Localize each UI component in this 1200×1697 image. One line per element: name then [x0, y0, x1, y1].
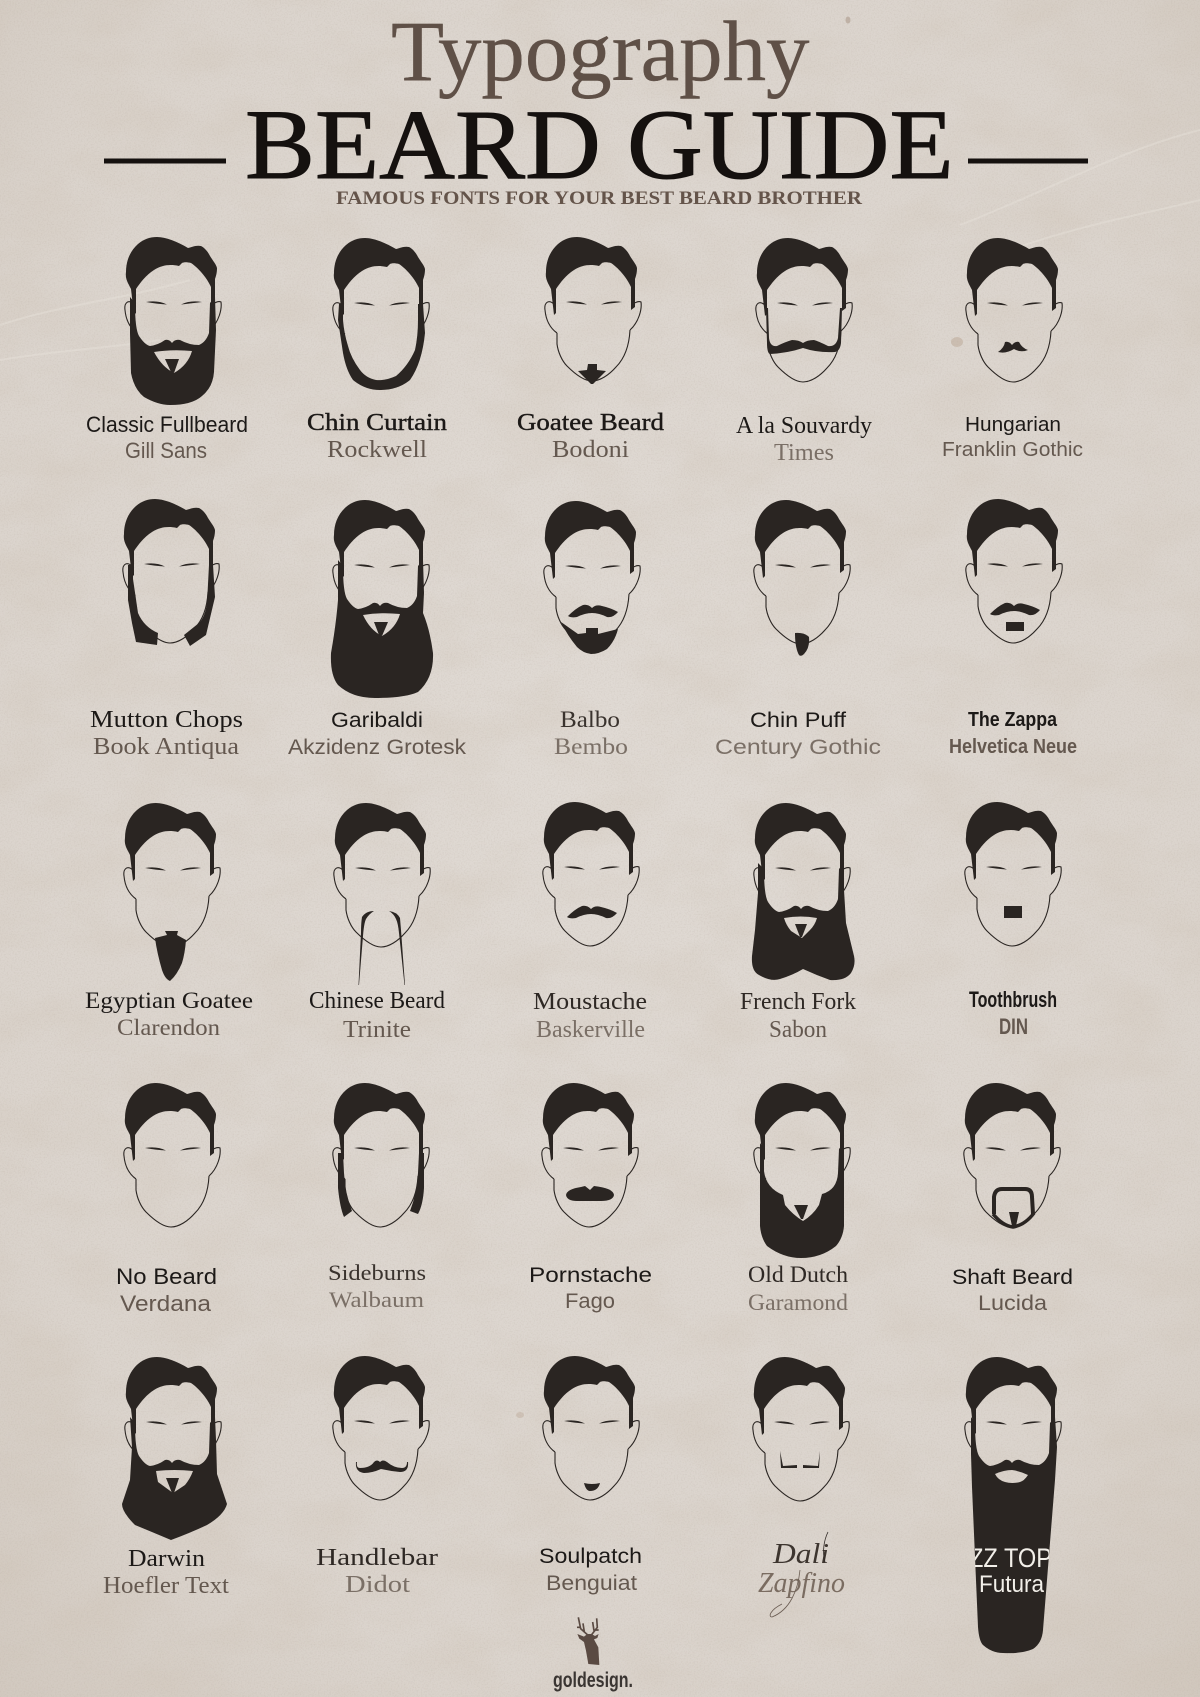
logo: deer head [577, 1617, 599, 1665]
face: French Fork [752, 803, 855, 980]
subtitle: FAMOUS FONTS FOR YOUR BEST BEARD BROTHER [336, 188, 862, 209]
label: Soulpatch / Benguiat: Benguiat [546, 1572, 637, 1595]
label: Toothbrush / DIN: DIN [999, 1014, 1028, 1039]
face: Old Dutch [754, 1083, 850, 1258]
label: Hungarian / Franklin Gothic [942, 414, 1083, 461]
label: Sideburns / Walbaum: Walbaum [329, 1287, 424, 1312]
label: Pornstache / Fago [529, 1264, 652, 1313]
label: Dali / Zapfino: Dali [772, 1539, 829, 1570]
label: French Fork / Sabon: French Fork [740, 989, 856, 1015]
face: The Zappa [966, 499, 1062, 643]
label: Egyptian Goatee / Clarendon: Egyptian Goatee [85, 988, 253, 1013]
label: Soulpatch / Benguiat [539, 1545, 642, 1595]
label: Mutton Chops / Book Antiqua: Mutton Chops [90, 707, 243, 733]
label: Mutton Chops / Book Antiqua: Book Antiqua [93, 734, 239, 760]
label: Garibaldi / Akzidenz Grotesk [288, 709, 467, 759]
face: A la Souvardy [756, 238, 852, 382]
face: Chin Puff [754, 500, 850, 656]
label: Balbo / Bembo: Bembo [554, 734, 628, 759]
label: Old Dutch / Garamond: Old Dutch [748, 1262, 849, 1287]
label: Balbo / Bembo: Balbo [560, 707, 620, 732]
label: Mutton Chops / Book Antiqua [90, 707, 243, 760]
face: Hungarian [966, 238, 1062, 382]
label: Chin Puff / Century Gothic: Century Gothic [715, 736, 881, 759]
face: Sideburns [333, 1083, 429, 1227]
label: Goatee Beard / Bodoni: Bodoni [552, 437, 629, 463]
label: Chin Puff / Century Gothic: Chin Puff [750, 709, 846, 732]
label: Classic Fullbeard / Gill Sans: Gill Sans [125, 438, 207, 463]
label: Hungarian / Franklin Gothic: Franklin Gothic [942, 439, 1083, 461]
label: Goatee Beard / Bodoni [517, 410, 664, 463]
label: Dali / Zapfino: Zapfino [758, 1568, 845, 1599]
label: Hungarian / Franklin Gothic: Hungarian [965, 414, 1061, 436]
label: Shaft Beard / Lucida: Shaft Beard [952, 1266, 1073, 1289]
label: Garibaldi / Akzidenz Grotesk: Garibaldi [331, 709, 423, 732]
logo: goldesign wordmark: goldesign. [553, 1669, 633, 1692]
label: ZZ Top / Futura [975, 1548, 1049, 1592]
label: Goatee Beard / Bodoni: Goatee Beard [517, 410, 664, 436]
face: Classic Fullbeard [125, 237, 221, 405]
face: Moustache [543, 802, 639, 946]
label: No Beard / Verdana [116, 1264, 217, 1316]
label: Handlebar / Didot [316, 1545, 438, 1598]
face: Balbo [544, 501, 640, 654]
label: Sideburns / Walbaum: Sideburns [328, 1260, 426, 1285]
label: Classic Fullbeard / Gill Sans [86, 412, 248, 463]
label: No Beard / Verdana: Verdana [120, 1291, 212, 1316]
face: Egyptian Goatee [124, 803, 220, 981]
label: Handlebar / Didot: Didot [345, 1572, 410, 1598]
label: Chinese Beard / Trinite: Chinese Beard [309, 988, 445, 1014]
label: Pornstache / Fago: Pornstache [529, 1264, 652, 1287]
label: ZZ Top / Futura: ZZ TOP [969, 1543, 1052, 1573]
label: Chinese Beard / Trinite [309, 988, 445, 1043]
label: Shaft Beard / Lucida [952, 1266, 1073, 1315]
face: Pornstache [542, 1083, 638, 1227]
label: French Fork / Sabon [740, 989, 856, 1043]
label: Moustache / Baskerville [533, 989, 647, 1043]
face: Chin Curtain [333, 238, 429, 390]
label: Darwin / Hoefler Text: Hoefler Text [103, 1573, 229, 1599]
face: Toothbrush [965, 802, 1061, 946]
face: Dali [753, 1357, 849, 1501]
label: ZZ Top / Futura: Futura [979, 1571, 1045, 1598]
face: Chinese Beard [334, 803, 430, 985]
label: Shaft Beard / Lucida: Lucida [978, 1292, 1047, 1315]
label: A la Souvardy / Times: Times [774, 440, 834, 466]
face: Darwin [122, 1357, 227, 1540]
label: Moustache / Baskerville: Moustache [533, 989, 647, 1015]
label: Soulpatch / Benguiat: Soulpatch [539, 1545, 642, 1568]
label: Chin Curtain / Rockwell: Chin Curtain [307, 410, 447, 436]
label: No Beard / Verdana: No Beard [116, 1264, 217, 1289]
label: Toothbrush / DIN [969, 987, 1057, 1039]
label: A la Souvardy / Times: A la Souvardy [736, 413, 872, 439]
label: French Fork / Sabon: Sabon [769, 1017, 827, 1043]
label: Handlebar / Didot: Handlebar [316, 1545, 438, 1571]
face: Garibaldi [331, 500, 433, 698]
label: Pornstache / Fago: Fago [565, 1290, 615, 1313]
label: Chin Curtain / Rockwell: Rockwell [327, 437, 427, 463]
label: Sideburns / Walbaum [328, 1260, 426, 1312]
label: Old Dutch / Garamond [748, 1262, 849, 1315]
label: Old Dutch / Garamond: Garamond [748, 1290, 849, 1315]
label: The Zappa / Helvetica Neue: The Zappa [968, 709, 1058, 731]
face: Goatee Beard [545, 237, 641, 384]
label: The Zappa / Helvetica Neue [949, 709, 1077, 758]
label: A la Souvardy / Times [736, 413, 872, 466]
label: The Zappa / Helvetica Neue: Helvetica Neue [949, 736, 1077, 758]
label: Darwin / Hoefler Text [103, 1546, 229, 1599]
face: Mutton Chops [123, 499, 219, 646]
label: Egyptian Goatee / Clarendon [85, 988, 253, 1040]
label: Moustache / Baskerville: Baskerville [536, 1017, 645, 1043]
label: Toothbrush / DIN: Toothbrush [969, 987, 1057, 1012]
face: ZZ Top [965, 1357, 1061, 1653]
heading: Beard Guide with side rules: BEARD GUIDE [245, 90, 954, 200]
label: Garibaldi / Akzidenz Grotesk: Akzidenz Grotesk [288, 736, 467, 759]
label: Balbo / Bembo [554, 707, 628, 759]
label: Darwin / Hoefler Text: Darwin [128, 1546, 205, 1572]
title: Typography: Typography [391, 3, 809, 99]
label: Chin Curtain / Rockwell [307, 410, 447, 463]
label: Chinese Beard / Trinite: Trinite [343, 1017, 411, 1043]
face: Handlebar [333, 1356, 429, 1500]
label: Classic Fullbeard / Gill Sans: Classic Fullbeard [86, 412, 248, 437]
label: Chin Puff / Century Gothic [715, 709, 881, 759]
face: Shaft Beard [964, 1083, 1060, 1227]
label: Egyptian Goatee / Clarendon: Clarendon [117, 1015, 221, 1040]
face: No Beard [124, 1083, 220, 1227]
label: Dali / Zapfino [758, 1532, 845, 1617]
face: Soulpatch [543, 1356, 639, 1500]
